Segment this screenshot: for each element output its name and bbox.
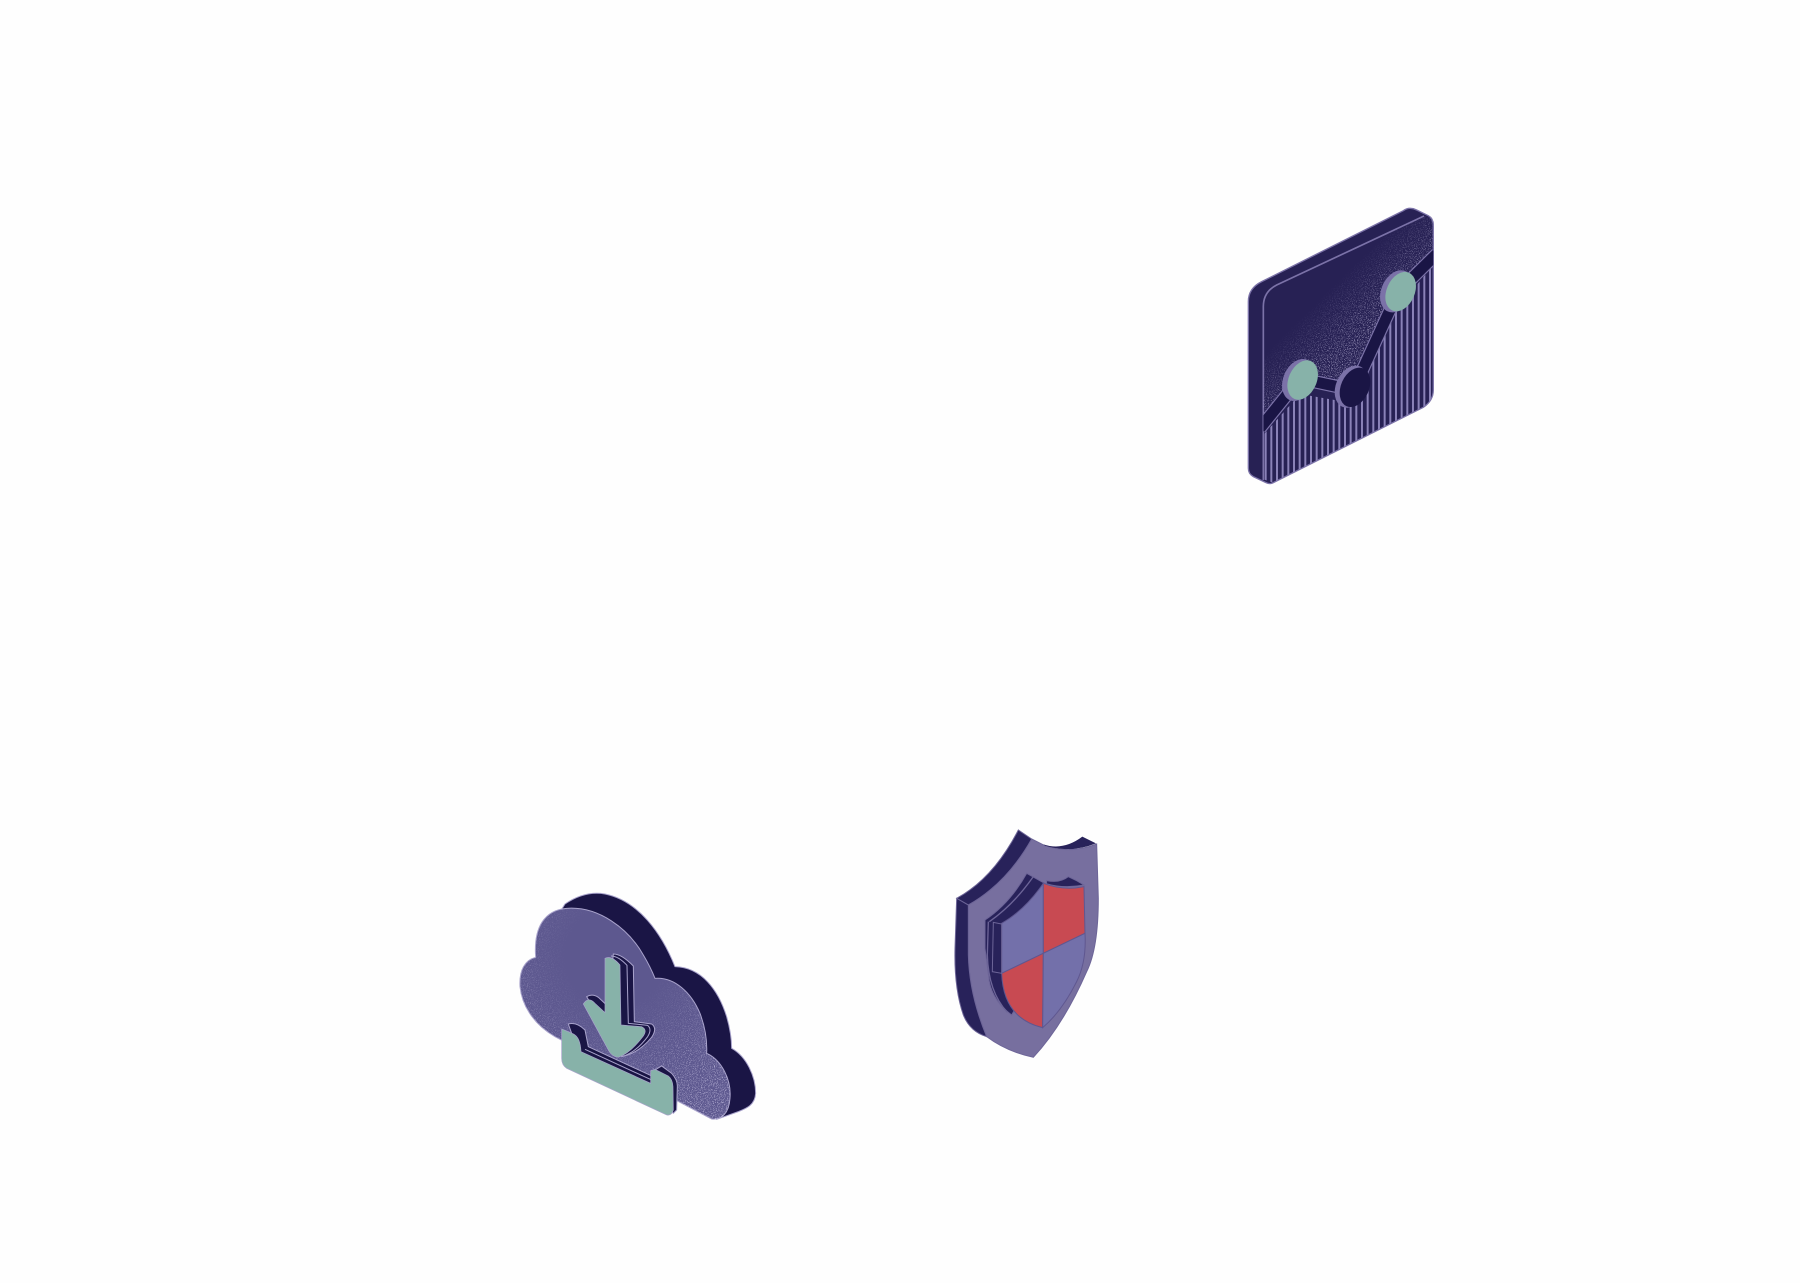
tray depth (568, 1023, 677, 1113)
icon: cloud download (515, 893, 756, 1123)
shield inner depth line (987, 877, 1033, 1012)
chart point middle (1328, 360, 1376, 413)
shield top sliver (1043, 837, 1096, 849)
chart point left (1276, 354, 1324, 406)
shield quarter top right (1043, 883, 1085, 953)
shield side (955, 830, 1032, 1037)
cloud grain texture (515, 903, 735, 1123)
shield inner left edge (992, 922, 1002, 973)
tray front (562, 1029, 673, 1115)
chart point right (1374, 265, 1422, 318)
arrow depth line (611, 956, 650, 1057)
cloud back side (538, 893, 756, 1119)
tray depth line (585, 1049, 652, 1080)
chart panel inner edge (1263, 216, 1424, 480)
icon: line chart panel (1248, 208, 1440, 490)
shield quarter bottom right (1043, 933, 1085, 1028)
arrow depth (587, 954, 655, 1057)
shield quarter top left (1002, 883, 1043, 973)
chart panel body (1248, 208, 1433, 484)
chart grain texture (1264, 216, 1434, 413)
chart stripes (1266, 257, 1430, 490)
cloud front (520, 908, 730, 1119)
shield quarter bottom left (1002, 953, 1043, 1028)
arrow front (583, 957, 645, 1057)
chart trend line (1260, 254, 1437, 428)
shield front (968, 839, 1098, 1057)
icon: shield (955, 830, 1098, 1057)
shield inner depth (985, 873, 1084, 1015)
